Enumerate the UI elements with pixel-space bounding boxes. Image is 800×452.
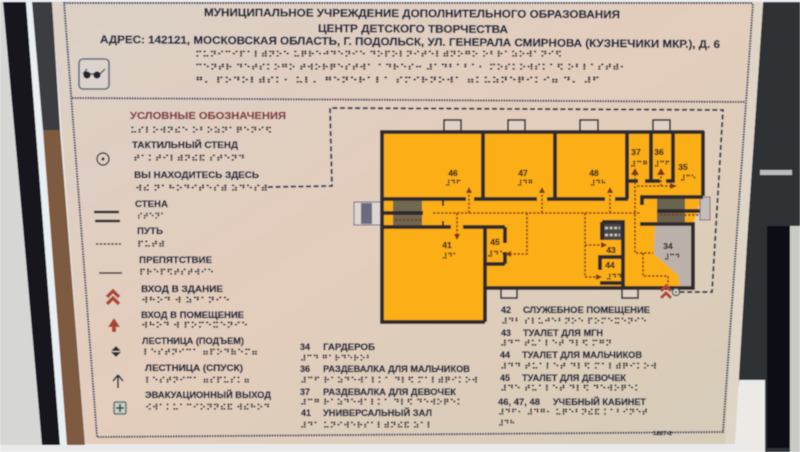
room list: right column: ⠼⠙⠙ ⠞⠥⠁⠇⠑⠞ ⠙⠇⠫ ⠍⠁⠇⠾⠟⠊⠅⠕⠺	[500, 362, 657, 371]
room numbers: 41	[442, 240, 452, 250]
room numbers: 48	[589, 168, 599, 178]
legend: ПУТЬ	[137, 226, 164, 236]
room list: left column: РАЗДЕВАЛКА ДЛЯ МАЛЬЧИКОВ	[323, 364, 471, 374]
room list: left column: 34	[300, 342, 310, 352]
legend: ⠏⠥⠞⠾	[137, 240, 165, 249]
room list: right column: ТУАЛЕТ ДЛЯ МАЛЬЧИКОВ	[522, 350, 643, 360]
room numbers: ⠼⠙⠙	[606, 273, 622, 282]
room list: right column: 45	[500, 373, 510, 383]
room numbers: ⠼⠙⠓	[590, 179, 606, 188]
room list: right column: 43	[501, 328, 511, 338]
room list: left column: 37	[300, 387, 310, 397]
legend: УСЛОВНЫЕ ОБОЗНАЧЕНИЯ	[130, 111, 286, 122]
room list: left column: 36	[300, 364, 310, 374]
title block: МУНИЦИПАЛЬНОЕ УЧРЕЖДЕНИЕ ДОПОЛНИТЕЛЬНОГО ОБРАЗОВАНИЯ	[204, 7, 620, 21]
windows	[444, 120, 670, 298]
room list: left column: ГАРДЕРОБ	[323, 342, 376, 352]
room numbers: 35	[678, 162, 688, 172]
room numbers: ⠼⠙⠛	[517, 179, 533, 188]
room list: right column: 42	[501, 305, 511, 315]
room list: right column	[498, 305, 657, 428]
title block: ⠍⠥⠝⠊⠉⠊⠏⠁⠇⠾⠝⠕⠑ ⠥⠟⠗⠑⠚⠙⠑⠝⠊⠑ ⠙⠕⠏⠕⠇⠝⠊⠞⠑⠇⠾⠝⠕⠛⠕ ⠕⠃⠗⠁⠵⠕⠺⠁⠝⠊⠫	[195, 50, 562, 59]
room list: left column	[300, 342, 478, 430]
title block: ⠛⠄ ⠏⠕⠙⠕⠇⠾⠎⠅⠂ ⠥⠇⠄ ⠛⠑⠝⠑⠗⠁⠇⠁ ⠎⠍⠊⠗⠝⠕⠺⠁ ⠶⠅⠥⠵⠝⠑⠟⠊⠅⠊⠶ ⠙⠄ ⠼⠋	[195, 76, 600, 85]
room numbers	[442, 147, 696, 282]
room numbers: ⠼⠉⠙	[664, 253, 680, 262]
legend: ⠎⠞⠑⠝⠁	[137, 212, 166, 221]
room numbers: 37	[631, 147, 641, 157]
room numbers: 45	[490, 237, 500, 247]
room numbers: ⠼⠉⠋	[654, 160, 670, 169]
title block: АДРЕС: 142121, МОСКОВСКАЯ ОБЛАСТЬ, Г. ПОДОЛЬСК, УЛ. ГЕНЕРАЛА СМИРНОВА (КУЗНЕЧИКИ МКР.), Д. 6	[100, 34, 720, 51]
legend: ЛЕСТНИЦА (ПОДЪЕМ)	[142, 336, 244, 346]
legend: ВХОД В ЗДАНИЕ	[141, 284, 223, 294]
room list: left column: ⠼⠙⠁ ⠥⠝⠊⠺⠑⠗⠎⠁⠇⠾⠝⠮⠯ ⠵⠁⠇	[300, 421, 433, 430]
room 34 cloakroom	[654, 225, 693, 287]
room list: left column: 41	[301, 408, 311, 418]
legend: ТАКТИЛЬНЫЙ СТЕНД	[132, 139, 239, 150]
room numbers: 47	[518, 168, 528, 178]
room list: right column: ⠼⠙⠉ ⠞⠥⠁⠇⠑⠞ ⠙⠇⠫ ⠍⠛⠝	[500, 339, 612, 348]
legend: ⠇⠑⠎⠞⠝⠊⠉⠁ ⠶⠎⠏⠥⠎⠅⠶	[145, 376, 250, 385]
room fill	[354, 131, 710, 321]
legend: ВХОД В ПОМЕЩЕНИЕ	[141, 310, 244, 320]
room list: right column: ⠼⠙⠋⠂ ⠼⠙⠛⠂ ⠥⠟⠑⠃⠝⠮⠯ ⠅⠁⠃⠊⠝⠑⠞	[498, 408, 648, 417]
room numbers: 36	[654, 147, 664, 157]
room list: left column: РАЗДЕВАЛКА ДЛЯ ДЕВОЧЕК	[323, 387, 457, 397]
room list: right column: 44	[500, 350, 510, 360]
tactile stand marker	[672, 288, 680, 296]
icon: glasses	[79, 59, 109, 89]
room list: left column: ⠼⠉⠋ ⠗⠁⠵⠙⠑⠺⠁⠇⠅⠁ ⠙⠇⠫ ⠍⠁⠇⠾⠟⠊⠅⠕⠺	[300, 376, 478, 385]
legend: ⠪⠺⠁⠅⠥⠁⠉⠊⠕⠝⠝⠮⠯ ⠺⠮⠓⠕⠙	[145, 403, 270, 412]
legend: СТЕНА	[135, 199, 169, 209]
title block: ЦЕНТР ДЕТСКОГО ТВОРЧЕСТВА	[318, 23, 508, 36]
legend: ⠺⠓⠕⠙ ⠺ ⠏⠕⠍⠑⠭⠑⠝⠊⠑	[141, 321, 248, 330]
room numbers: ⠼⠙⠁	[442, 252, 458, 261]
legend	[130, 111, 286, 412]
legend: ⠥⠎⠇⠕⠺⠝⠮⠑ ⠕⠃⠕⠵⠝⠁⠟⠑⠝⠊⠫	[130, 126, 272, 135]
route arrows	[454, 168, 677, 280]
room list: right column: ⠼⠙⠓	[498, 419, 515, 428]
room numbers: 44	[605, 260, 615, 270]
room list: right column: УЧЕБНЫЙ КАБИНЕТ	[553, 396, 647, 407]
room list: right column: ТУАЛЕТ ДЛЯ МГН	[523, 328, 603, 338]
room 42 service room	[602, 222, 623, 240]
dashed route frame from legend to stand	[268, 108, 723, 292]
legend: ⠇⠑⠎⠞⠝⠊⠉⠁ ⠶⠏⠕⠙⠷⠑⠍⠶	[143, 348, 258, 357]
room numbers: ⠼⠉⠑	[680, 174, 696, 183]
entrance marker	[661, 286, 671, 298]
legend icons	[94, 153, 126, 414]
room numbers: ⠼⠙⠑	[487, 250, 505, 259]
room numbers: 34	[663, 241, 673, 251]
room list: left column: ⠼⠉⠙ ⠛⠁⠗⠙⠑⠗⠕⠃	[300, 354, 372, 363]
legend: ⠺⠓⠕⠙ ⠺ ⠵⠙⠁⠝⠊⠑	[141, 296, 230, 305]
room numbers: 43	[606, 245, 616, 255]
legend: ПРЕПЯТСТВИЕ	[139, 255, 212, 265]
legend: ЭВАКУАЦИОННЫЙ ВЫХОД	[145, 389, 272, 400]
room numbers: 46	[448, 168, 458, 178]
room list: right column: СЛУЖЕБНОЕ ПОМЕЩЕНИЕ	[523, 305, 650, 315]
stairs	[393, 198, 685, 225]
legend: ⠞⠁⠅⠞⠊⠇⠾⠝⠮⠯ ⠎⠞⠑⠝⠙	[133, 154, 245, 163]
title block: ⠉⠑⠝⠞⠗ ⠙⠑⠞⠎⠅⠕⠛⠕ ⠞⠺⠕⠗⠟⠑⠎⠞⠺⠁ ⠁⠙⠗⠑⠎⠒ ⠼⠁⠙⠃⠁⠃⠁⠂ ⠍⠕⠎⠅⠕⠺⠎⠅⠁⠫ ⠕⠃⠇⠁⠎⠞⠾⠂	[195, 63, 627, 72]
floor plan	[354, 120, 710, 322]
room numbers: ⠼⠉⠛	[630, 160, 648, 169]
room numbers: ⠼⠙⠋	[445, 179, 461, 188]
walls	[380, 131, 704, 322]
room list: right column: 46, 47, 48	[498, 397, 540, 407]
plate code: 1227-2	[653, 431, 672, 437]
legend: ⠺⠮ ⠝⠁⠓⠕⠙⠊⠞⠑⠎⠾ ⠵⠙⠑⠎⠾	[135, 184, 268, 193]
legend: ⠏⠗⠑⠏⠫⠞⠎⠞⠺⠊⠑	[139, 268, 214, 277]
legend: ЛЕСТНИЦА (СПУСК)	[145, 363, 243, 373]
room list: left column: ⠼⠉⠛ ⠗⠁⠵⠙⠑⠺⠁⠇⠅⠁ ⠙⠇⠫ ⠙⠑⠺⠕⠟⠑⠅	[300, 398, 463, 407]
room list: left column: УНИВЕРСАЛЬНЫЙ ЗАЛ	[323, 407, 432, 418]
legend: ВЫ НАХОДИТЕСЬ ЗДЕСЬ	[134, 170, 260, 180]
evacuation route	[395, 172, 700, 285]
title block	[100, 7, 720, 85]
room list: right column: ⠼⠙⠃ ⠎⠇⠥⠚⠑⠃⠝⠕⠑ ⠏⠕⠍⠑⠭⠑⠝⠊⠑	[501, 317, 647, 326]
room list: right column: ТУАЛЕТ ДЛЯ ДЕВОЧЕК	[522, 373, 627, 383]
room list: right column: ⠼⠙⠑ ⠞⠥⠁⠇⠑⠞ ⠙⠇⠫ ⠙⠑⠺⠕⠟⠑⠅	[500, 384, 641, 393]
